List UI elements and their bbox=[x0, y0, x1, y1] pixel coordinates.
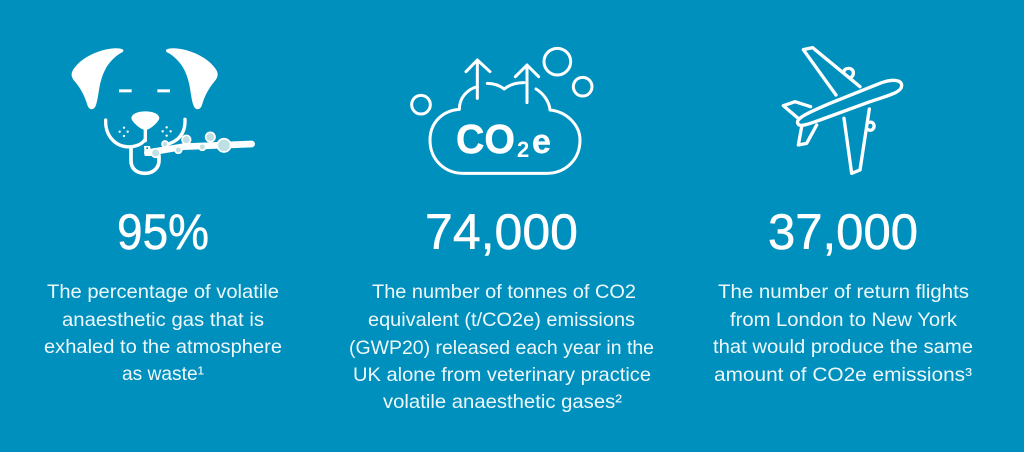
cloud label: CO2e: e bbox=[532, 123, 551, 161]
statistic: 74,000: 74,000 bbox=[425, 204, 578, 260]
text: flights description: The number of return flights bbox=[718, 281, 969, 303]
text: CO2e description bbox=[349, 281, 654, 413]
text: CO2e description: volatile anaesthetic gases² bbox=[383, 391, 623, 413]
panel: CO2e emissions bbox=[349, 48, 654, 413]
cloud label: CO2e: 2 bbox=[517, 137, 529, 162]
text: CO2e description: equivalent (t/CO2e) emissions bbox=[368, 309, 635, 331]
text: exhaled gas description: exhaled to the atmosphere bbox=[44, 336, 282, 358]
text: exhaled gas description: as waste¹ bbox=[122, 363, 204, 385]
cloud label: CO2e: CO bbox=[456, 116, 515, 162]
text: exhaled gas description: anaesthetic gas that is bbox=[62, 309, 264, 331]
text: CO2e description: UK alone from veterinary practice bbox=[353, 364, 651, 386]
panel: exhaled gas bbox=[44, 48, 282, 385]
text: CO2e description: The number of tonnes of CO2 bbox=[372, 281, 636, 303]
icon: dog with breathing tube bbox=[72, 48, 252, 173]
statistic: 95%: 95% bbox=[117, 204, 209, 260]
text: flights description: that would produce the same bbox=[713, 336, 973, 358]
icon: CO2e cloud with arrows bbox=[412, 48, 592, 173]
text: flights description: amount of CO2e emissions³ bbox=[714, 364, 973, 386]
text: flights description bbox=[713, 281, 973, 386]
text: flights description: from London to New York bbox=[730, 309, 957, 331]
panel: flights bbox=[713, 48, 973, 386]
icon: plane bbox=[783, 48, 902, 173]
cloud label: CO2e bbox=[456, 116, 551, 162]
text: exhaled gas description bbox=[44, 281, 282, 385]
text: CO2e description: (GWP20) released each year in the bbox=[349, 337, 654, 359]
text: exhaled gas description: The percentage of volatile bbox=[47, 281, 279, 303]
statistic: 37,000: 37,000 bbox=[768, 204, 918, 260]
